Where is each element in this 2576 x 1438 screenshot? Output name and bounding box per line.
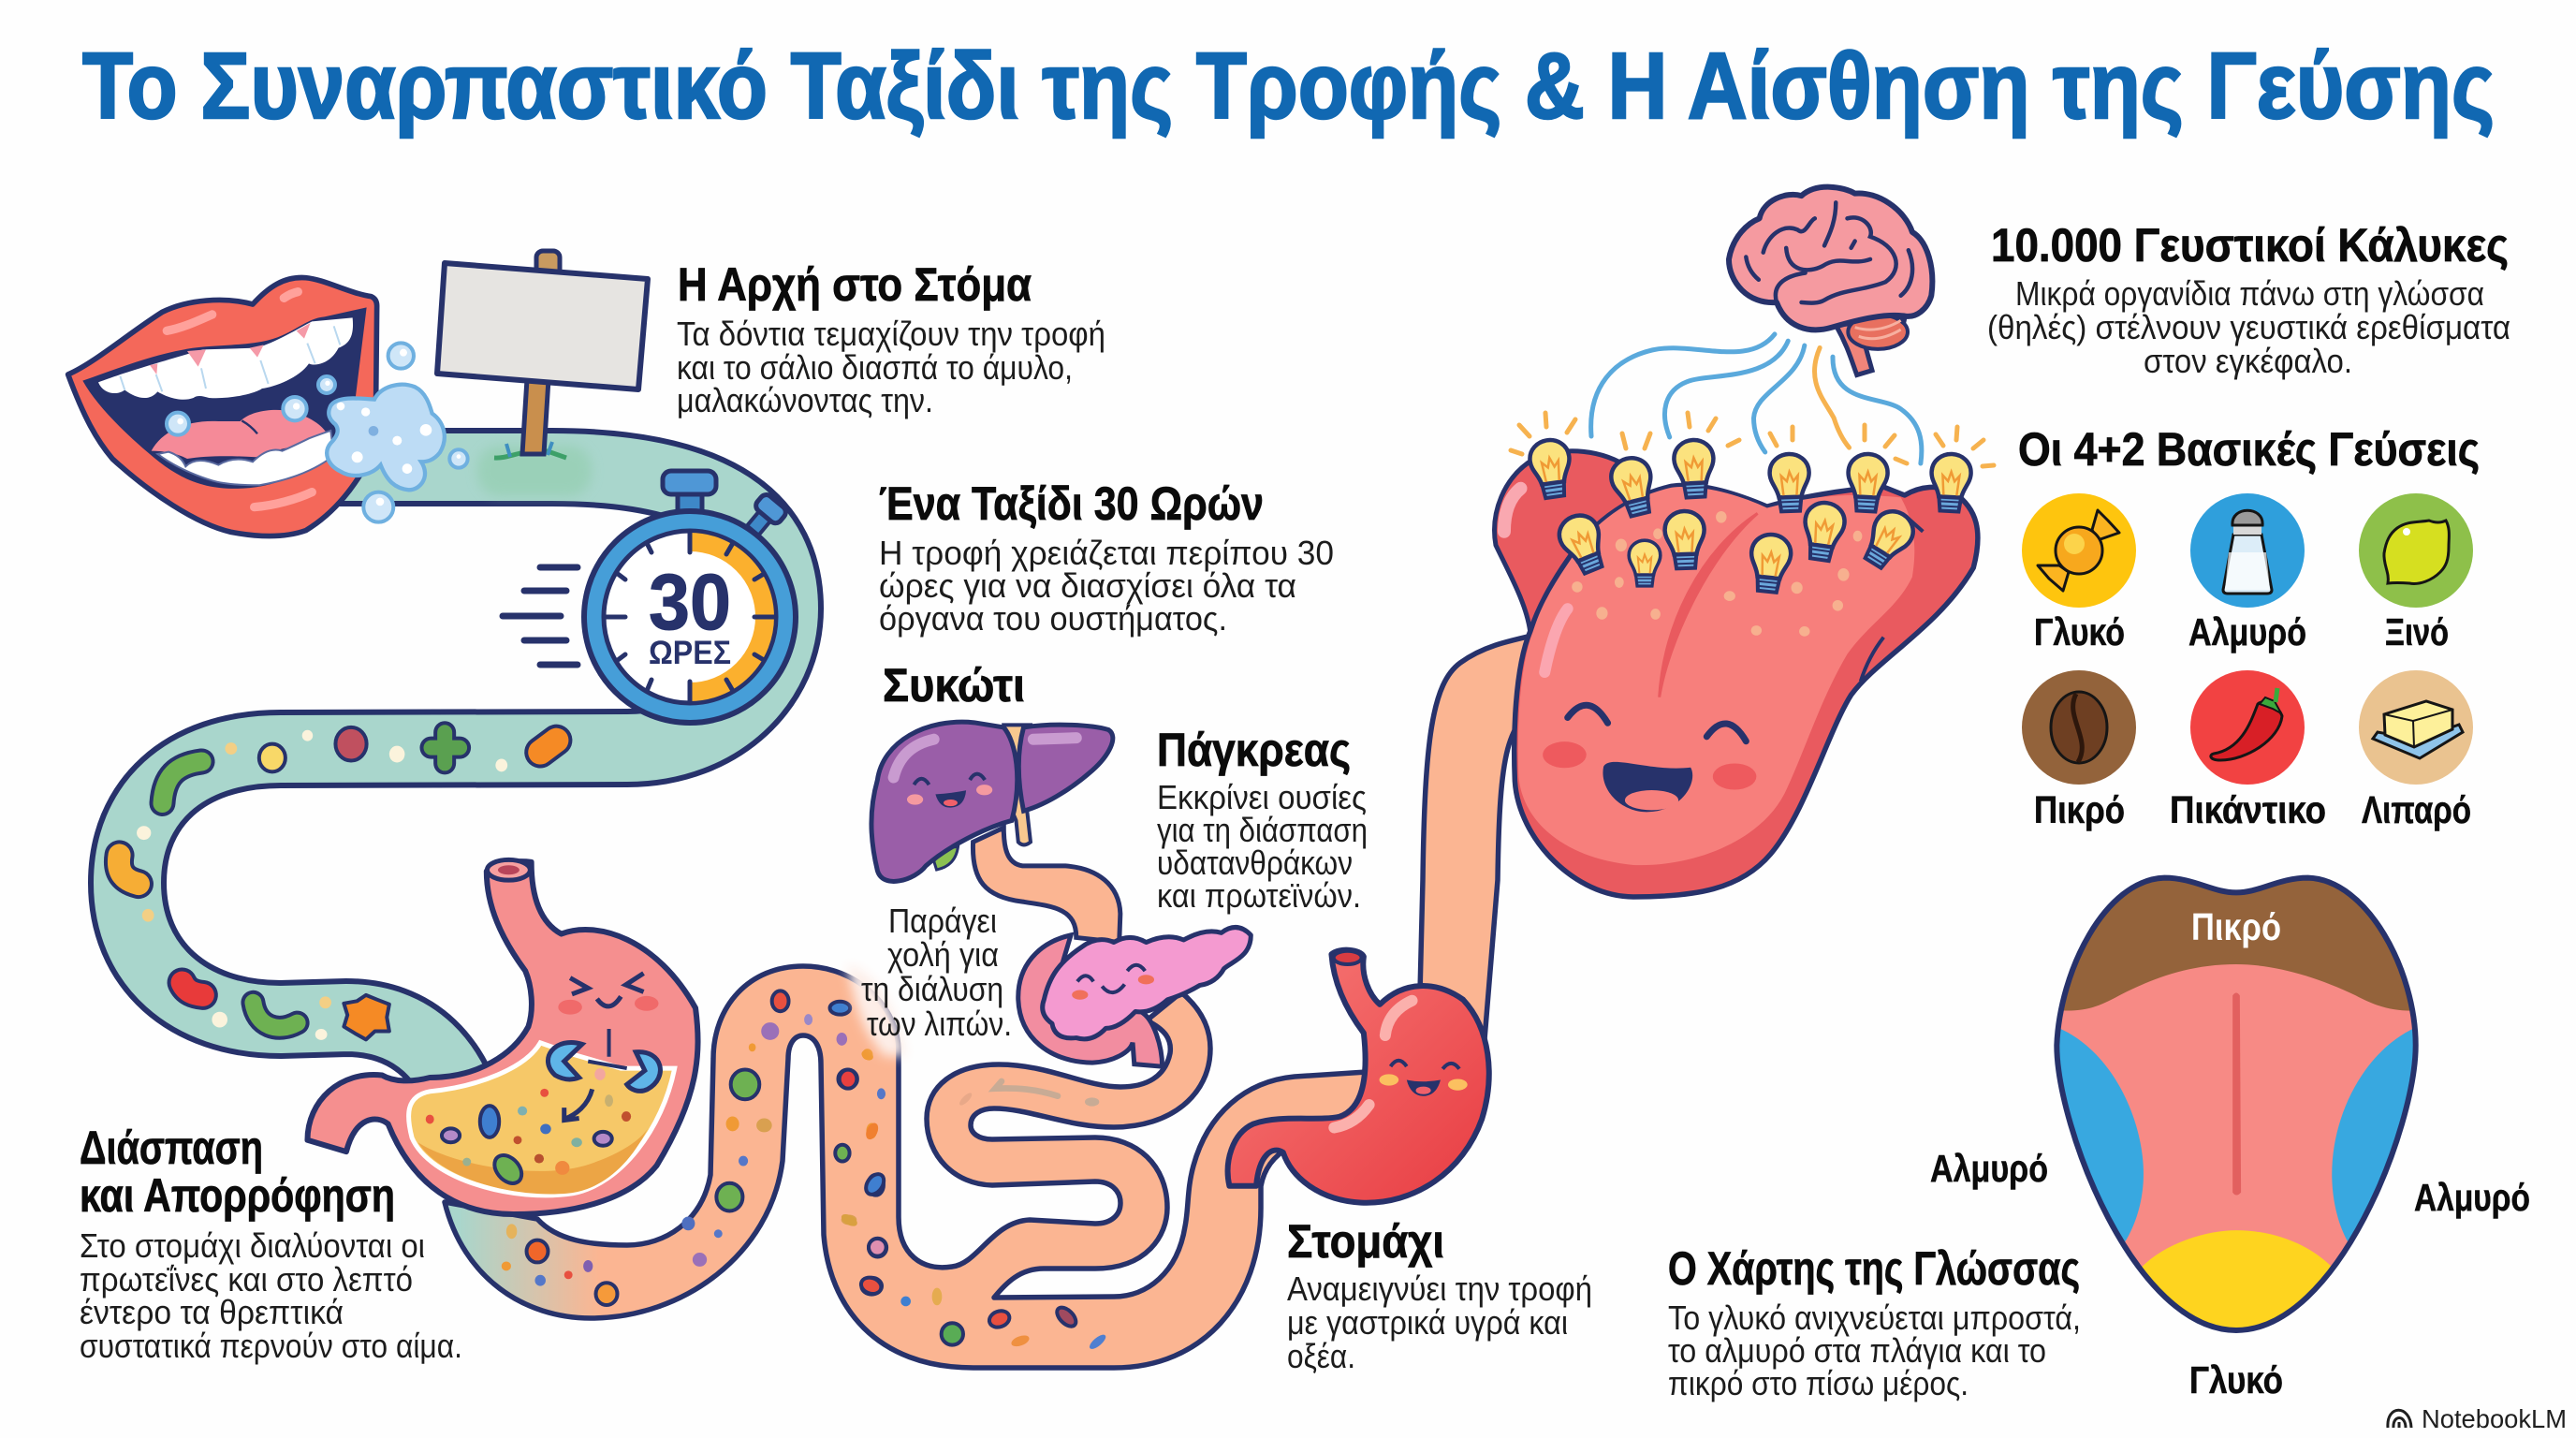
tongue body shadow <box>1515 485 1978 897</box>
text: Ο Χάρτης της Γλώσσας: το αλμυρό στα πλάγια και το <box>1668 1331 2046 1370</box>
taste labels: Ξινό <box>2385 610 2449 653</box>
tube to tongue <box>1420 633 1544 1039</box>
NotebookLM logo: NotebookLM <box>2422 1404 2567 1433</box>
icon: coffee bean <box>2022 670 2136 785</box>
face <box>1568 705 1746 741</box>
tongue map labels: Αλμυρό <box>2414 1176 2530 1219</box>
bile duct <box>973 828 1120 943</box>
face <box>570 974 644 994</box>
nerves <box>1591 334 1922 463</box>
text: Στομάχι: με γαστρικά υγρά και <box>1287 1303 1568 1342</box>
stopwatch: 30 hours: ΩΡΕΣ <box>649 635 731 671</box>
text: Πάγκρεας: και πρωτεϊνών. <box>1157 876 1361 915</box>
taste labels: Αλμυρό <box>2188 610 2306 653</box>
text: Συκώτι <box>861 659 1025 1043</box>
saliva foam <box>327 385 445 490</box>
lips <box>68 278 377 536</box>
taste bud bulbs with rays <box>1511 413 1994 594</box>
text: Στομάχι: οξέα. <box>1287 1337 1355 1375</box>
blank sign on grass <box>437 251 648 496</box>
faded patch behind liver caption <box>847 964 906 1056</box>
text: Στομάχι: Στομάχι <box>1287 1215 1444 1268</box>
text: Η Αρχή στο Στόμα <box>677 258 1105 419</box>
text: Διάσπαση και Απορρόφηση: έντερο τα θρεπτικά <box>80 1293 344 1331</box>
text: Πάγκρεας: Εκκρίνει ουσίες <box>1157 778 1367 816</box>
text: Ο Χάρτης της Γλώσσας <box>1668 1242 2081 1402</box>
text: Συκώτι: Παράγει <box>888 902 997 940</box>
illustration: smiling tongue <box>1495 451 1978 897</box>
text: Διάσπαση και Απορρόφηση: και Απορρόφηση <box>80 1169 395 1222</box>
text: Η Αρχή στο Στόμα: Η Αρχή στο Στόμα <box>678 258 1032 311</box>
papillae <box>1572 511 1862 637</box>
text: Ένα Ταξίδι 30 Ωρών: Η τροφή χρειάζεται περίπου 30 <box>879 534 1334 572</box>
icon: candy <box>2022 493 2136 608</box>
text: Διάσπαση και Απορρόφηση <box>80 1122 462 1365</box>
tongue map labels: Αλμυρό <box>1930 1147 2048 1190</box>
text: Πάγκρεας: Πάγκρεας <box>1157 724 1351 776</box>
icon: chili <box>2190 670 2305 785</box>
teal food particles <box>119 727 556 1040</box>
lower tongue in mouth <box>152 410 326 459</box>
illustration: mouth with saliva <box>68 278 468 536</box>
text: Συκώτι: Συκώτι <box>883 659 1025 712</box>
panel: the 4+2 basic tastes <box>2018 423 2480 831</box>
upper teeth <box>98 317 353 400</box>
text: Συκώτι: τη διάλυση <box>861 970 1003 1008</box>
icon: lemon <box>2359 493 2473 608</box>
brain stem <box>1836 318 1905 375</box>
text: Διάσπαση και Απορρόφηση: Διάσπαση <box>80 1122 263 1174</box>
saliva bubbles <box>167 343 468 522</box>
text: 10.000 Γευστικοί Κάλυκες <box>1987 219 2510 380</box>
stopwatch: 30 hours: 30 <box>649 558 731 646</box>
text: Διάσπαση και Απορρόφηση: συστατικά περνούν στο αίμα. <box>80 1327 462 1365</box>
small intestine particles <box>502 990 911 1306</box>
taste labels: Γλυκό <box>2034 610 2125 653</box>
stomach with food contents <box>307 859 698 1214</box>
cerebrum <box>1729 187 1932 330</box>
enzymes <box>548 1042 660 1091</box>
text: Ένα Ταξίδι 30 Ωρών: Ένα Ταξίδι 30 Ωρών <box>879 477 1264 530</box>
tongue body <box>1518 487 1914 865</box>
taste labels: Λιπαρό <box>2362 788 2471 831</box>
text: Διάσπαση και Απορρόφηση: πρωτεΐνες και στο λεπτό <box>80 1260 413 1299</box>
text: Πάγκρεας: υδατανθράκων <box>1157 844 1353 882</box>
text: 10.000 Γευστικοί Κάλυκες: 10.000 Γευστικοί Κάλυκες <box>1991 219 2509 271</box>
food contents <box>409 1043 675 1196</box>
text: Ο Χάρτης της Γλώσσας: πικρό στο πίσω μέρος. <box>1668 1364 1969 1402</box>
text: Ένα Ταξίδι 30 Ωρών: ώρες για να διασχίσει όλα τα <box>879 566 1296 605</box>
taste labels: Πικρό <box>2034 788 2125 831</box>
text: 10.000 Γευστικοί Κάλυκες: Μικρά οργανίδια πάνω στη γλώσσα <box>2015 274 2484 313</box>
text: Ο Χάρτης της Γλώσσας: Ο Χάρτης της Γλώσσας <box>1668 1242 2080 1295</box>
taste labels: Πικάντικο <box>2170 788 2326 831</box>
back lobes <box>1495 451 1641 631</box>
text: Στομάχι <box>1287 1215 1592 1375</box>
text: Στομάχι: Αναμειγνύει την τροφή <box>1287 1269 1592 1308</box>
tongue map labels <box>1930 905 2530 1401</box>
text: 10.000 Γευστικοί Κάλυκες: στον εγκέφαλο. <box>2144 342 2352 380</box>
digestive tract: small intestine tube <box>445 966 1367 1368</box>
taste labels <box>2034 610 2471 831</box>
mouth interior <box>82 307 367 489</box>
stomach red character <box>1228 950 1489 1203</box>
tongue taste map <box>2045 873 2427 1340</box>
text: Συκώτι: χολή για <box>887 935 999 974</box>
text: Ο Χάρτης της Γλώσσας: Το γλυκό ανιχνεύεται μπροστά, <box>1668 1299 2081 1337</box>
text: Ένα Ταξίδι 30 Ωρών <box>879 477 1334 638</box>
text: Πάγκρεας: για τη διάσπαση <box>1157 811 1368 849</box>
heading: Οι 4+2 Βασικές Γεύσεις <box>2018 423 2480 476</box>
liver <box>871 722 1113 881</box>
tongue map labels: Γλυκό <box>2189 1358 2283 1401</box>
stopwatch: 30 hours <box>503 471 796 723</box>
text: Διάσπαση και Απορρόφηση: Στο στομάχι διαλύονται οι <box>80 1226 425 1265</box>
icon: butter <box>2359 670 2473 785</box>
tongue map labels: Πικρό <box>2191 905 2281 948</box>
text: Η Αρχή στο Στόμα: μαλακώνοντας την. <box>677 381 933 419</box>
text: Η Αρχή στο Στόμα: Τα δόντια τεμαχίζουν την τροφή <box>677 315 1105 353</box>
text: Πάγκρεας <box>1157 724 1368 915</box>
speed lines <box>503 567 578 665</box>
text: Συκώτι: των λιπών. <box>867 1005 1012 1043</box>
text: 10.000 Γευστικοί Κάλυκες: (θηλές) στέλνουν γευστικά ερεθίσματα <box>1987 308 2510 346</box>
text: Ένα Ταξίδι 30 Ωρών: όργανα του ουστήματος. <box>879 599 1227 638</box>
pancreas and duodenum <box>1018 928 1251 1066</box>
brain with nerves <box>1591 187 1932 463</box>
digestive tract: large intestine tube <box>127 467 784 1142</box>
icon: salt shaker <box>2190 493 2305 608</box>
text: Η Αρχή στο Στόμα: και το σάλιο διασπά το άμυλο, <box>677 348 1073 387</box>
lower teeth <box>157 431 334 485</box>
